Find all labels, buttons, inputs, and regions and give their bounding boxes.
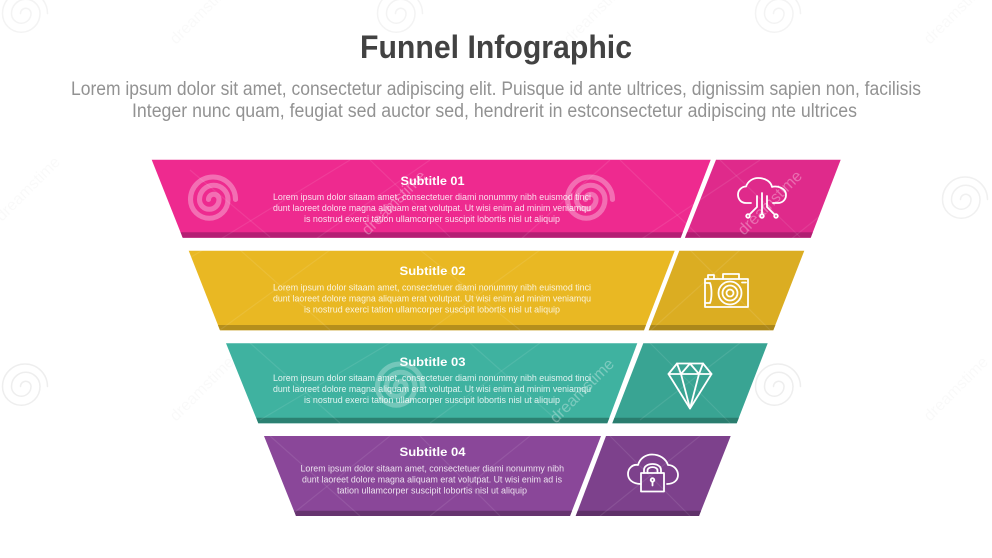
body text 04: tation ullamcorper suscipit lobortis nisl ut aliquip — [337, 486, 527, 496]
band: level 2 icon cell bottom edge — [649, 325, 775, 330]
body text 01: Lorem ipsum dolor sitaam amet, consectetuer diami nonummy nibh euismod tinci — [273, 192, 591, 202]
title: Funnel Infographic — [360, 29, 632, 65]
band: level 1 main — [152, 160, 711, 238]
watermark spirals level 1: dreamstime — [735, 168, 806, 239]
icon: camera — [705, 274, 748, 307]
body text 02: dunt laoreet dolore magna aliquam erat volutpat. Ut wisi enim ad minim veniamqu — [273, 294, 591, 304]
band: level 2 main — [189, 251, 675, 330]
body text 03: dunt laoreet dolore magna aliquam erat volutpat. Ut wisi enim ad minim veniamqu — [273, 384, 591, 394]
band: level 3 bottom edge — [256, 418, 609, 423]
body text 04: Lorem ipsum dolor sitaam amet, consectetuer diami nonummy nibh — [300, 464, 564, 474]
body text 04: dunt laoreet dolore magna aliquam erat volutpat. Ut wisi enim ad is — [302, 474, 562, 484]
panel: funnel level 4 — [264, 436, 731, 516]
intro text — [71, 79, 921, 122]
band: level 4 bottom edge — [294, 511, 572, 516]
icon: cloud network — [738, 178, 786, 218]
band: level 4 icon cell bottom edge — [576, 511, 701, 516]
body text 01: dunt laoreet dolore magna aliquam erat volutpat. Ut wisi enim ad minim veniamqu — [273, 203, 591, 213]
intro text: Lorem ipsum dolor sit amet, consectetur adipiscing elit. Puisque id ante ultrices, dignissim sapien non, facilisis — [71, 79, 921, 100]
subtitle 01: Subtitle 01 — [400, 174, 465, 188]
band: level 3 icon cell — [612, 343, 768, 423]
band: level 1 bottom edge — [181, 232, 683, 238]
panel: funnel level 2 — [189, 251, 804, 330]
body text 03 — [273, 373, 591, 405]
subtitle 02: Subtitle 02 — [400, 264, 466, 278]
body text 02 — [273, 282, 591, 314]
band: level 1 icon cell — [685, 160, 841, 238]
subtitle 03: Subtitle 03 — [400, 355, 466, 369]
watermark spiral level 3 — [378, 356, 618, 427]
background watermark pattern — [0, 0, 992, 425]
panel: funnel level 3 — [226, 343, 768, 427]
body text 02: is nostrud exerci tation ullamcorper suscipit lobortis nisl ut aliquip — [304, 304, 560, 314]
band: level 4 icon cell — [576, 436, 731, 516]
band: level 2 bottom edge — [218, 325, 646, 330]
band: level 2 icon cell — [649, 251, 804, 330]
background watermark pattern: dreamstime — [921, 354, 992, 425]
subtitle 04: Subtitle 04 — [400, 445, 466, 459]
intro text: Integer nunc quam, feugiat sed auctor sed, hendrerit in estconsectetur adipiscing nte ultrices — [132, 101, 857, 122]
watermark spiral level 3: dreamstime — [547, 356, 618, 427]
body text 04 — [300, 464, 564, 496]
band: level 3 main — [226, 343, 637, 423]
panel: funnel level 1 — [152, 160, 841, 239]
icon: diamond — [668, 364, 712, 408]
background watermark pattern: dreamstime — [167, 354, 238, 425]
band: level 1 icon cell bottom edge — [685, 232, 813, 238]
body text 03: is nostrud exerci tation ullamcorper suscipit lobortis nisl ut aliquip — [304, 395, 560, 405]
body text 01: is nostrud exerci tation ullamcorper suscipit lobortis nisl ut aliquip — [304, 214, 560, 224]
watermark spirals level 1 — [190, 168, 806, 239]
icon: cloud lock — [628, 454, 678, 492]
body text 02: Lorem ipsum dolor sitaam amet, consectetuer diami nonummy nibh euismod tinci — [273, 282, 591, 292]
band: level 4 main — [264, 436, 601, 516]
body text 01 — [273, 192, 591, 224]
watermark spirals level 1: dreamstime — [359, 168, 430, 239]
body text 03: Lorem ipsum dolor sitaam amet, consectetuer diami nonummy nibh euismod tinci — [273, 373, 591, 383]
band: level 3 icon cell bottom edge — [612, 418, 739, 423]
